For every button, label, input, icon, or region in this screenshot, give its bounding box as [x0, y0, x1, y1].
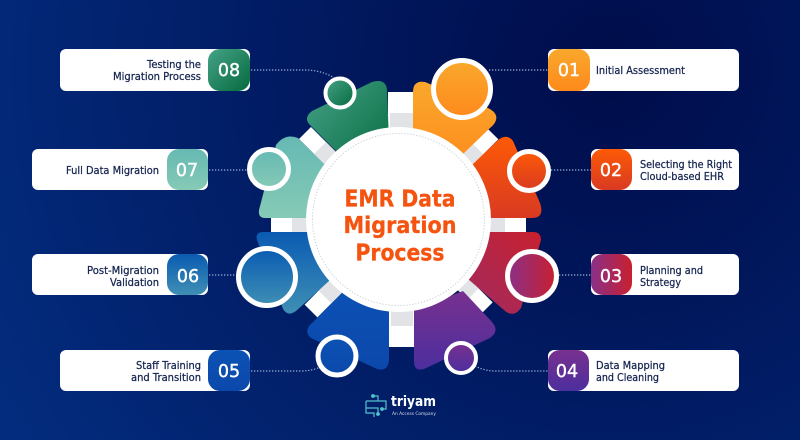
circle 03: [508, 252, 556, 300]
card 04: Data Mapping: [596, 359, 665, 372]
card 07: [32, 149, 208, 190]
circle 05: [318, 337, 356, 375]
circle 06: [238, 248, 296, 306]
card 05: and Transition: [131, 371, 201, 384]
card 04: 04: [556, 362, 578, 382]
segment 08 green: [307, 81, 389, 170]
card 08: [60, 49, 250, 91]
card 06: 06: [177, 267, 199, 287]
center circle: [306, 127, 491, 312]
title: [344, 186, 456, 266]
segment 02 red: [460, 137, 541, 218]
radial connector bars: [271, 92, 526, 347]
card 08: Testing the: [146, 58, 201, 71]
title: Migration: [344, 213, 456, 239]
circle 07: [250, 150, 288, 188]
card 02: 02: [600, 161, 622, 181]
title: Process: [356, 240, 444, 266]
card 07: 07: [176, 161, 198, 181]
segment 04 purple: [414, 291, 496, 370]
logo: [366, 394, 436, 417]
card 02: [591, 149, 739, 190]
segment 07 teal: [259, 137, 340, 218]
card 04: [548, 350, 739, 391]
card 01: Initial Assessment: [596, 64, 686, 77]
card 02: Selecting the Right: [640, 158, 733, 171]
card 03: 03: [600, 267, 622, 287]
card 03: Planning and: [640, 264, 703, 277]
card 05: 05: [218, 362, 240, 382]
logo: triyam: [391, 394, 436, 410]
card 03: [591, 254, 739, 295]
circle 01: [434, 60, 490, 118]
card 06: Post-Migration: [87, 264, 159, 277]
card 06: [32, 254, 208, 295]
card 08: Migration Process: [113, 70, 201, 83]
card 02: Cloud-based EHR: [640, 170, 724, 183]
circle 04: [446, 343, 476, 373]
card 01: [548, 49, 739, 91]
title: EMR Data: [344, 186, 456, 212]
card 07: Full Data Migration: [66, 164, 159, 177]
circle 08: [326, 78, 354, 108]
card 01: 01: [558, 61, 580, 81]
card 08: 08: [218, 61, 240, 81]
circle 02: [510, 152, 548, 190]
card 05: Staff Training: [136, 359, 201, 372]
segment 05 blue: [307, 280, 389, 370]
segment 06 blue-teal: [257, 232, 335, 314]
dotted connectors: [209, 70, 591, 371]
card 05: [60, 350, 250, 391]
logo: An Access Company: [392, 411, 436, 417]
segment 03 maroon: [450, 232, 541, 314]
card 03: Strategy: [640, 276, 681, 289]
card 06: Validation: [110, 276, 159, 289]
card 04: and Cleaning: [596, 371, 659, 384]
segment 01 orange: [413, 82, 496, 170]
icon: logo mark: [366, 395, 386, 417]
